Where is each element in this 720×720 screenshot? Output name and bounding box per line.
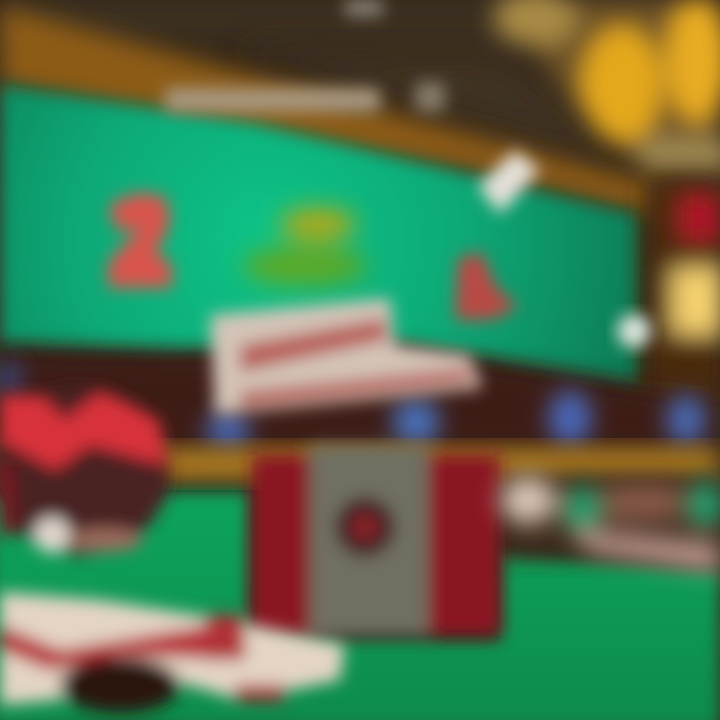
banner	[210, 298, 482, 415]
white dot	[617, 314, 651, 348]
ceiling lights	[493, 0, 720, 175]
sign on wall	[165, 0, 445, 112]
chips right	[500, 476, 720, 572]
chips foreground	[0, 592, 345, 713]
dark strip behind right chips	[500, 478, 720, 556]
white card	[478, 150, 540, 214]
wooden beam	[0, 5, 660, 218]
green table	[0, 492, 720, 720]
card box	[252, 445, 500, 635]
green felt wall	[0, 85, 640, 385]
table rail	[0, 448, 720, 480]
chip stack left	[0, 385, 170, 555]
blue lights	[0, 362, 706, 450]
number 2	[108, 193, 172, 288]
right wall panel	[645, 180, 720, 405]
lower dark wall	[0, 350, 720, 450]
number 1	[455, 252, 518, 320]
gold emblem	[243, 208, 367, 286]
